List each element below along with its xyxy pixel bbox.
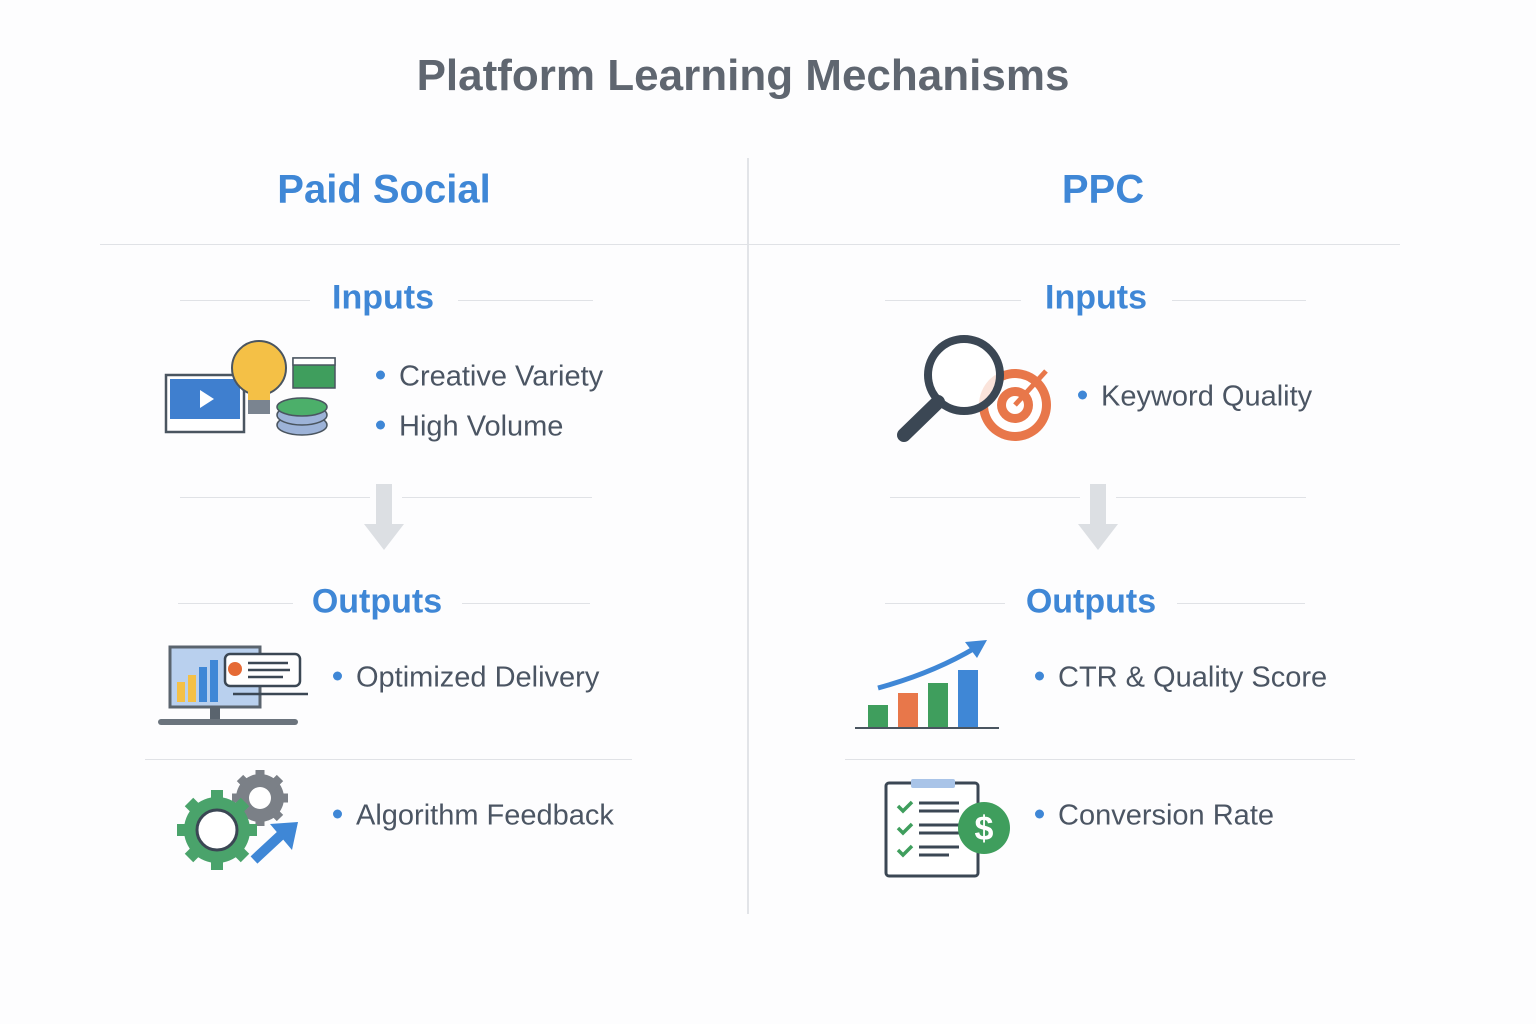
bullet: creative variety: Creative Variety — [399, 360, 603, 392]
arrow: down — [1078, 484, 1118, 550]
icon: gears — [177, 770, 298, 870]
bullet: algorithm feedback: Algorithm Feedback — [356, 800, 614, 832]
icon: creative inputs — [164, 340, 336, 436]
heading: outputs: Outputs — [1026, 582, 1156, 620]
heading: inputs: Inputs — [332, 278, 434, 316]
icon: clipboard dollar: $ — [975, 810, 994, 848]
bullet: conversion rate: Conversion Rate — [1058, 800, 1274, 832]
icon: bar chart — [855, 640, 999, 729]
heading: outputs: Outputs — [312, 582, 442, 620]
icon: monitor — [158, 646, 308, 725]
bullet: optimized delivery: Optimized Delivery — [356, 662, 599, 694]
icon: clipboard dollar — [884, 779, 1010, 878]
icon: magnifier target — [897, 335, 1051, 442]
title: Platform Learning Mechanisms — [417, 51, 1069, 100]
bullet: keyword quality: Keyword Quality — [1101, 380, 1312, 412]
heading: paid social: Paid Social — [277, 168, 491, 212]
bullet: high volume: High Volume — [399, 410, 563, 442]
bullet: ctr & quality score: CTR & Quality Score — [1058, 662, 1327, 694]
panel: ppc — [845, 168, 1355, 878]
arrow: down — [364, 484, 404, 550]
heading: ppc: PPC — [1062, 168, 1144, 212]
heading: inputs: Inputs — [1045, 278, 1147, 316]
panel: paid social — [145, 168, 632, 870]
